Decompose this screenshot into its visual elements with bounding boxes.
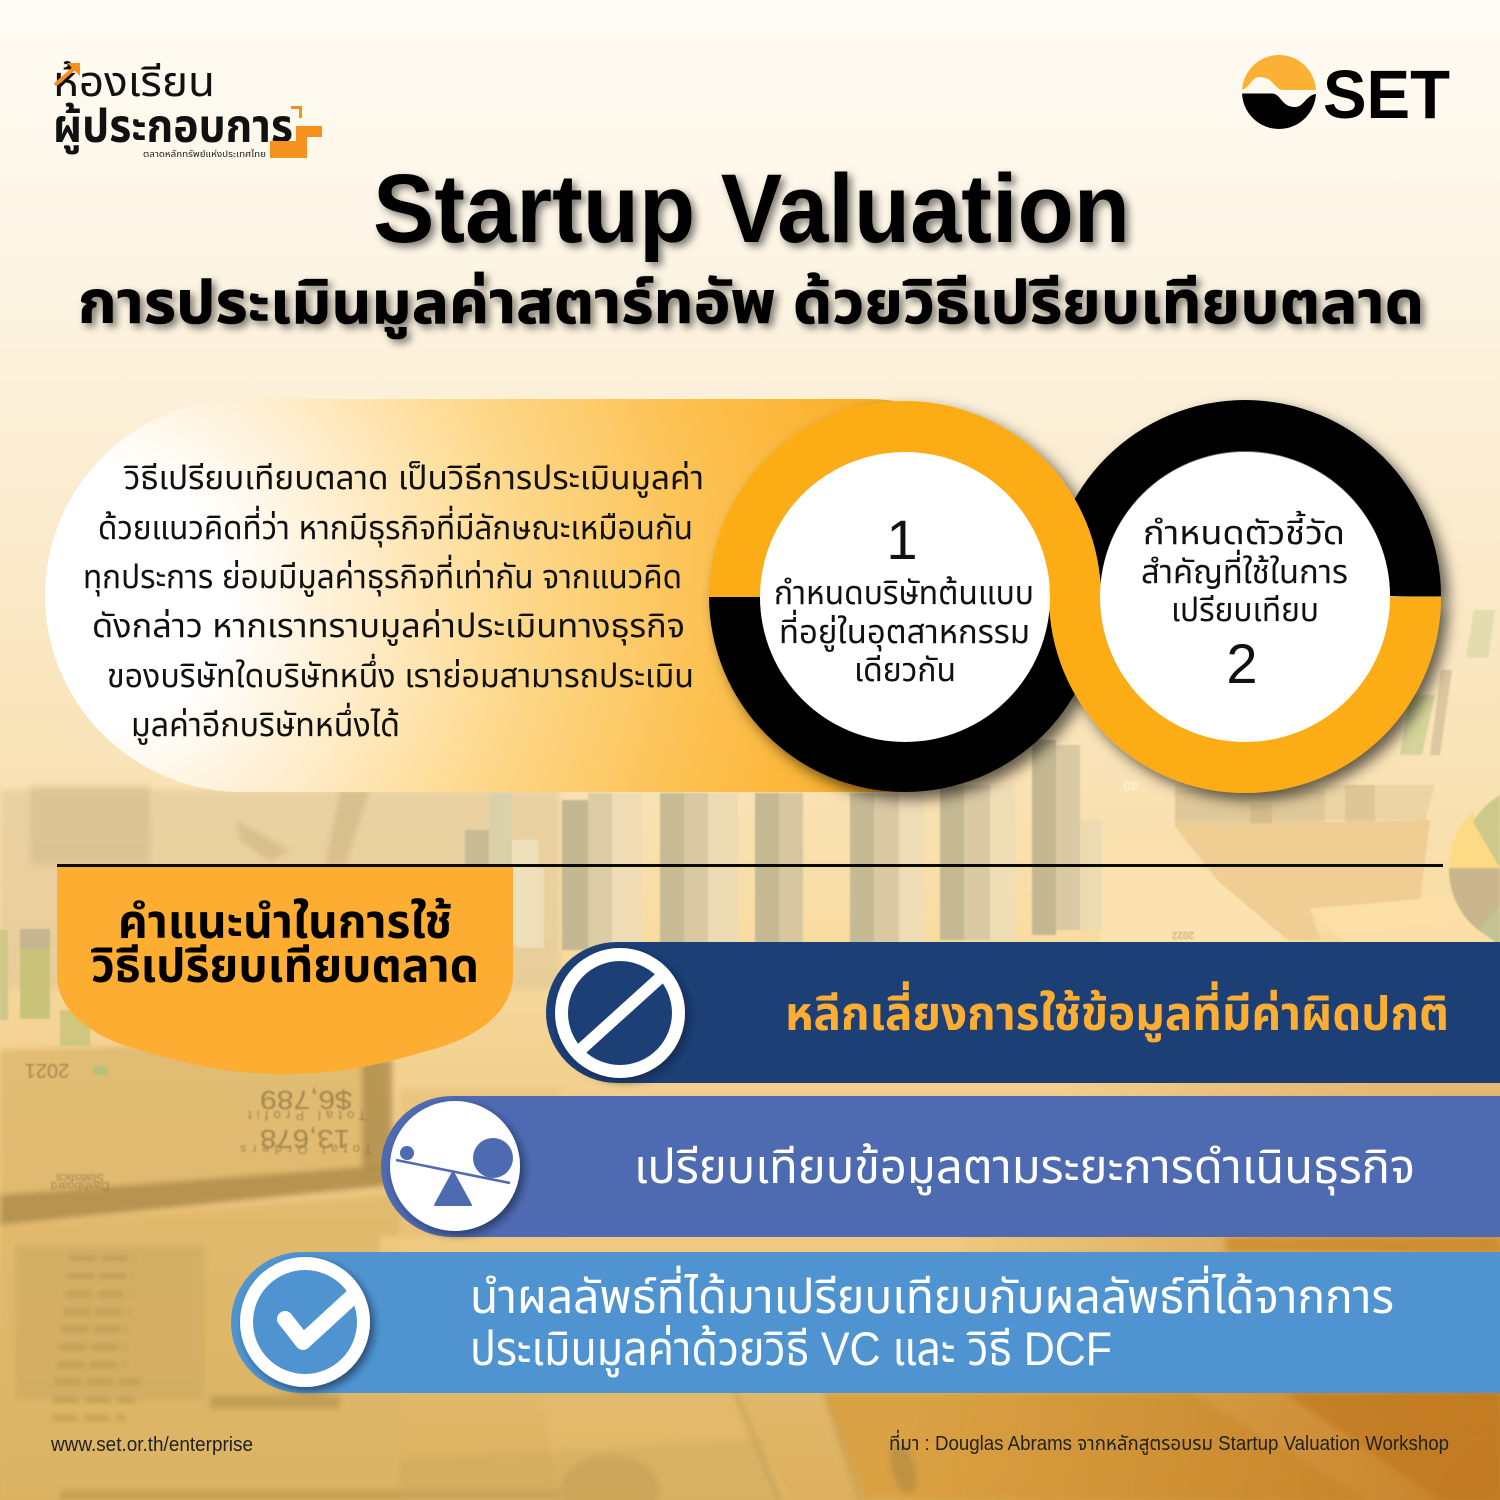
icon: check mark [240,1257,370,1387]
subtitle: การประเมินมูลค่าสตาร์ทอัพ ด้วยวิธีเปรียบเทียบตลาด [78,269,1424,339]
definition text: ทุกประการ ย่อมมีมูลค่าธุรกิจที่เท่ากัน จากแนวคิด [83,554,682,597]
step 1 circle [760,452,1050,742]
logo: Enterprise classroom [53,58,322,159]
chart labels in photo [25,778,1194,1193]
panel: tips heading tab [57,867,513,1074]
ring orange segments [709,401,1441,793]
definition text: ด้วยแนวคิดที่ว่า หากมีธุรกิจที่มีลักษณะเหมือนกัน [98,505,693,548]
definition text: วิธีเปรียบเทียบตลาด เป็นวิธีการประเมินมูลค่า [124,459,704,498]
logo: Enterprise classroom: ผู้ประกอบการ [53,100,293,154]
tip 2: compare by business stage: เปรียบเทียบข้อมูลตามระยะการดำเนินธุรกิจ [634,1140,1415,1195]
tip 1: avoid outliers: หลีกเลี่ยงการใช้ข้อมูลที่มีค่าผิดปกติ [785,981,1449,1042]
chart labels in photo: Dashboard [51,1179,109,1193]
panel: tips heading tab: วิธีเปรียบเทียบตลาด [90,939,479,992]
logo: SET [1242,55,1450,129]
definition text: มูลค่าอีกบริษัทหนึ่งได้ [131,702,400,745]
step 1 circle: กำหนดบริษัทต้นแบบ [774,574,1034,611]
chart labels in photo: Statistics [56,1171,104,1185]
step 1 circle: ที่อยู่ในอุตสาหกรรม [779,609,1030,652]
tip 1: avoid outliers [546,942,1500,1083]
panel: definition pill [45,399,906,792]
chart labels in photo: 13,678 [260,1124,350,1154]
footer: source: ที่มา : Douglas Abrams จากหลักสูตรอบรม Startup Valuation Workshop [889,1429,1449,1456]
logo: Enterprise classroom: ตลาดหลักทรัพย์แห่งประเทศไทย [143,149,266,159]
definition text: ของบริษัทใดบริษัทหนึ่ง เราย่อมสามารถประเมิน [107,653,694,694]
tip 3: compare with VC and DCF: ประเมินมูลค่าด้วยวิธี VC และ วิธี DCF [470,1322,1112,1377]
chart labels in photo: 40 [1123,778,1139,794]
step 1 circle: 1 [886,508,918,571]
panel: tips heading tab: คำแนะนำในการใช้ [118,895,452,948]
logo: SET: SET [1323,56,1450,133]
step 2 circle: 2 [1226,632,1258,695]
footer: website: www.set.or.th/enterprise [50,1434,253,1456]
tip 2: compare by business stage [381,1096,1500,1237]
step 2 circle: เปรียบเทียบ [1171,591,1319,628]
ring black segments [709,400,1441,792]
infinity steps diagram [709,400,1441,793]
step 2 circle: กำหนดตัวชี้วัด [1143,510,1345,551]
title: Startup Valuation [373,154,1130,263]
definition text: ดังกล่าว หากเราทราบมูลค่าประเมินทางธุรกิจ [92,607,685,646]
step 1 circle: เดียวกัน [854,651,956,688]
chart labels in photo: $6,789 [260,1085,352,1115]
chart labels in photo: Total Orders [240,1142,372,1157]
step 2 circle: สำคัญที่ใช้ในการ [1141,549,1348,590]
chart labels in photo: 2022 [1171,929,1194,940]
step 2 circle [1100,452,1390,742]
icon: balance seesaw [390,1101,520,1231]
chart labels in photo: 2021 [25,1059,69,1081]
definition text [83,459,704,745]
icon: prohibited [555,948,685,1078]
tip 3: compare with VC and DCF [231,1252,1500,1393]
chart labels in photo: Total Profit [248,1108,366,1123]
logo: Enterprise classroom: ห้องเรียน [53,58,215,105]
tip 3: compare with VC and DCF: นำผลลัพธ์ที่ได้มาเปรียบเทียบกับผลลัพธ์ที่ได้จากการ [470,1265,1394,1323]
